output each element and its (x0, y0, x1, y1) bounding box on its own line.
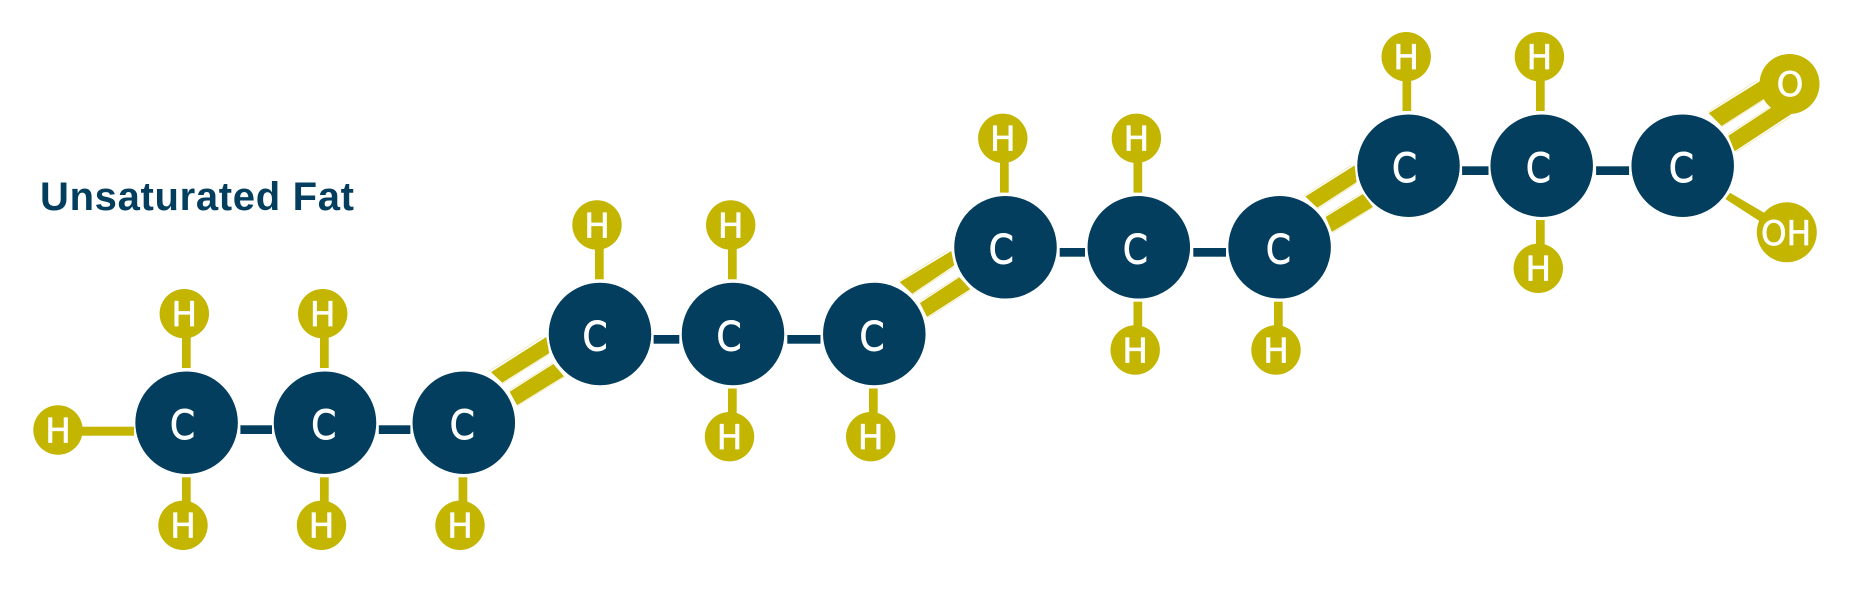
C atom: C (1266, 228, 1291, 274)
C atom: C (716, 314, 742, 360)
H atom: H (170, 507, 196, 547)
bond to hydroxyl (1725, 193, 1768, 222)
oxygen atom: O (1777, 65, 1803, 105)
H atom: H (718, 206, 743, 246)
C atom (822, 282, 926, 386)
C atom (1490, 114, 1594, 218)
C atom (1087, 195, 1191, 299)
hydroxyl group (1757, 202, 1817, 262)
C atom: C (1526, 146, 1551, 192)
H atom (846, 412, 895, 461)
H atom: H (1122, 332, 1148, 372)
C atom: C (989, 228, 1014, 274)
H atom: H (1393, 38, 1419, 78)
C atom (135, 371, 239, 475)
H atom: H (1526, 250, 1551, 290)
H atom (298, 289, 347, 338)
H atom (297, 501, 346, 550)
H atom: H (447, 507, 473, 547)
H atom (1251, 325, 1301, 375)
C atom (681, 282, 785, 386)
C atom (1631, 114, 1735, 218)
H atom: H (1263, 332, 1289, 372)
C atom: C (860, 314, 884, 360)
H atom: H (1527, 38, 1552, 78)
C atom: C (450, 403, 475, 449)
C atom: C (311, 403, 336, 449)
carbon-carbon single bonds (240, 166, 1629, 434)
C atom (548, 282, 652, 386)
C atom (412, 371, 516, 475)
H atom: H (1124, 120, 1149, 160)
C atom: C (170, 403, 195, 449)
H atom (1515, 32, 1564, 81)
C atom: C (1669, 146, 1694, 192)
oxygen atom (1760, 54, 1820, 114)
H atom: H (172, 295, 197, 335)
H atom (705, 412, 754, 461)
H atom (1514, 244, 1563, 293)
C atom (273, 371, 377, 475)
H atom (978, 114, 1028, 163)
H atom: H (309, 507, 334, 547)
carbon-hydrogen single bonds (82, 60, 1545, 510)
C atom (1228, 195, 1332, 299)
double bond to oxygen (1708, 79, 1791, 152)
H atom (435, 501, 485, 550)
hydroxyl group: OH (1761, 214, 1811, 254)
H atom: H (717, 418, 742, 458)
H atom (706, 200, 755, 250)
C atom: C (582, 314, 608, 360)
H atom (33, 405, 83, 455)
H atom (1382, 32, 1431, 81)
H atom (160, 289, 209, 338)
C atom: C (1123, 228, 1148, 274)
H atom: H (310, 295, 335, 335)
double bond 1 (488, 338, 565, 406)
C atom (954, 195, 1058, 299)
H atom (158, 501, 208, 550)
H atom (572, 200, 622, 250)
hydrogen atoms (33, 32, 1564, 550)
H atom (1110, 325, 1160, 375)
double bond 2 (898, 251, 971, 318)
H atom: H (858, 418, 883, 458)
C atom: C (1392, 146, 1417, 192)
H atom: H (584, 206, 610, 246)
H atom (1112, 114, 1161, 163)
H atom: H (990, 120, 1016, 160)
carbon atoms (135, 114, 1735, 475)
title: Unsaturated Fat (40, 175, 354, 219)
double bond 3 (1304, 165, 1373, 232)
H atom: H (45, 412, 71, 452)
C atom (1356, 114, 1460, 218)
